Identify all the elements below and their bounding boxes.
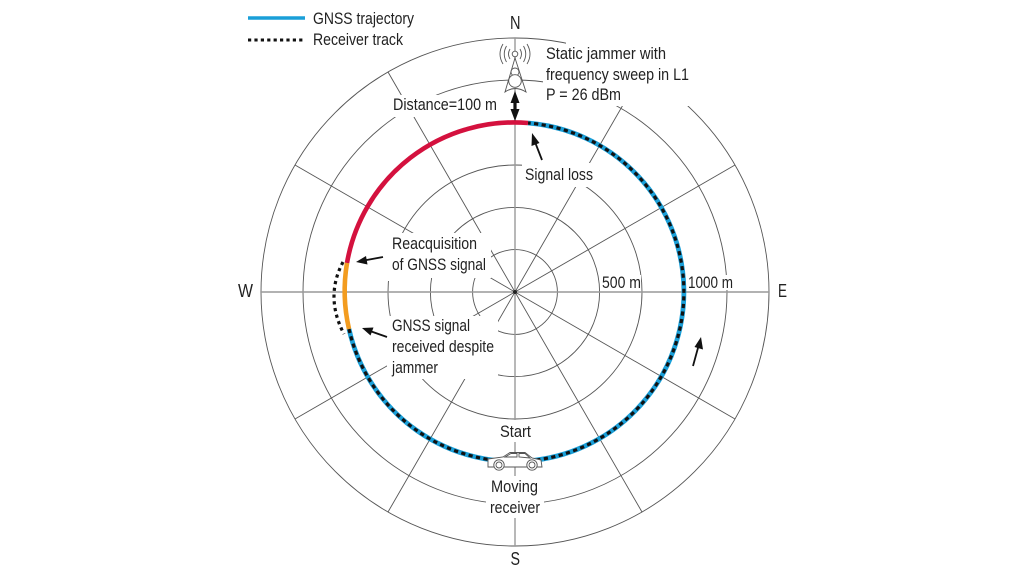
reacquisition group <box>356 234 486 274</box>
reacquisition group: Reacquisition <box>392 234 477 253</box>
signal loss group <box>525 133 593 184</box>
direction arrow <box>693 337 703 366</box>
received despite jammer group: received despite <box>392 337 494 356</box>
receiver track dotted deviation <box>334 262 344 334</box>
legend: GNSS trajectory: GNSS trajectory <box>313 9 414 28</box>
compass labels: W <box>238 281 253 301</box>
moving receiver label: Moving <box>491 477 538 496</box>
compass labels: E <box>778 281 787 301</box>
jammer label: P = 26 dBm <box>546 85 621 104</box>
received despite jammer group: jammer <box>391 358 438 377</box>
scale labels <box>602 273 733 292</box>
distance label: Distance=100 m <box>393 95 497 114</box>
signal loss group: Signal loss <box>525 165 593 184</box>
icon: jammer tower <box>500 44 530 92</box>
moving receiver label <box>490 477 540 517</box>
GNSS trajectory: blue segment with receiver track dots <box>349 123 684 461</box>
compass labels: N <box>510 13 520 33</box>
polar grid <box>261 30 769 546</box>
moving receiver label: receiver <box>490 498 540 517</box>
reacquired segment: orange arc <box>345 263 349 329</box>
legend: receiver track: Receiver track <box>313 30 403 49</box>
jammer label: frequency sweep in L1 <box>546 65 689 84</box>
received despite jammer group <box>362 316 494 377</box>
start label: Start <box>500 422 531 441</box>
compass labels <box>238 13 787 569</box>
jammer label <box>546 44 689 104</box>
legend <box>248 9 414 49</box>
jammed segment: red arc <box>347 122 528 263</box>
icon: car <box>488 452 542 470</box>
scale labels: 500 m <box>602 273 641 292</box>
scale labels: 1000 m <box>688 273 733 292</box>
jammer label: Static jammer with <box>546 44 666 63</box>
compass labels: S <box>510 549 520 569</box>
received despite jammer group: GNSS signal <box>392 316 470 335</box>
distance double arrow <box>510 91 520 121</box>
reacquisition group: of GNSS signal <box>392 255 486 274</box>
